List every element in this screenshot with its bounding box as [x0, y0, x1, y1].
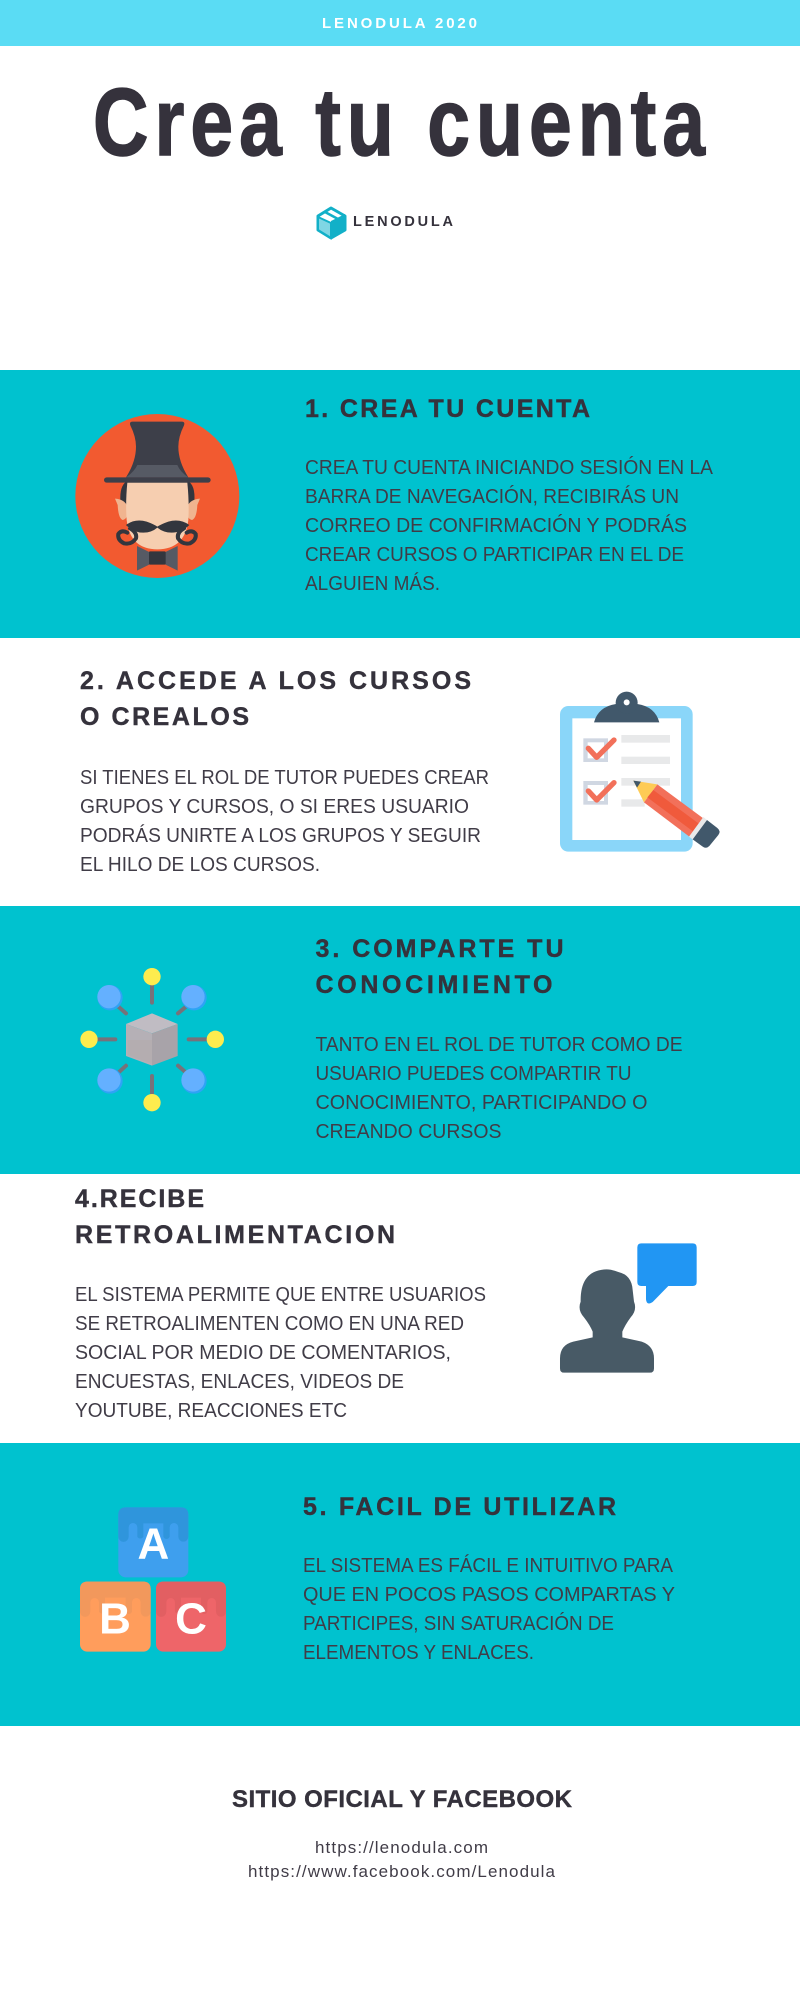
heading: step 3: 3. COMPARTE TU: [316, 935, 564, 963]
heading: step 4: [75, 1185, 395, 1249]
icon: ABC blocks: B: [99, 1594, 131, 1643]
panel: step 5: [0, 1443, 800, 1726]
panel: step 4: [75, 1185, 697, 1422]
text block: step 5: EL SISTEMA ES FÁCIL E INTUITIVO PARA: [303, 1554, 673, 1577]
text block: step 4: ENCUESTAS, ENLACES, VIDEOS DE: [75, 1370, 404, 1393]
icon: person with speech bubble: [560, 1243, 697, 1373]
logo: LENODULA: [353, 214, 454, 230]
icon: cube network: [80, 968, 224, 1111]
text block: step 5: QUE EN POCOS PASOS COMPARTAS Y: [303, 1583, 675, 1606]
heading: step 3: CONOCIMIENTO: [316, 971, 552, 999]
text block: step 1: [305, 456, 713, 595]
title: Crea tu cuenta: [93, 69, 706, 176]
icon: ABC blocks: C: [175, 1594, 207, 1643]
heading: step 2: O CREALOS: [80, 703, 249, 731]
text block: step 4: [75, 1283, 486, 1422]
heading: step 2: 2. ACCEDE A LOS CURSOS: [80, 667, 471, 695]
icon: logo box: [318, 208, 345, 238]
text block: step 3: [316, 1033, 682, 1143]
panel: step 1: 1. CREA TU CUENTA: [305, 395, 590, 423]
text block: step 3: USUARIO PUEDES COMPARTIR TU: [316, 1062, 632, 1085]
text block: step 2: GRUPOS Y CURSOS, O SI ERES USUARIO: [80, 795, 469, 818]
text block: step 1: ALGUIEN MÁS.: [305, 572, 440, 595]
text block: step 4: SE RETROALIMENTEN COMO EN UNA RED: [75, 1312, 464, 1335]
logo: [318, 208, 454, 238]
top banner: [0, 0, 800, 46]
icon: ABC blocks: A: [137, 1519, 169, 1568]
panel: step 2: [80, 667, 720, 876]
text block: step 2: SI TIENES EL ROL DE TUTOR PUEDES CREAR: [80, 766, 489, 789]
top banner: LENODULA 2020: [322, 15, 477, 32]
text block: step 2: [80, 766, 489, 876]
text block: step 3: CREANDO CURSOS: [316, 1120, 502, 1143]
text block: step 5: PARTICIPES, SIN SATURACIÓN DE: [303, 1612, 614, 1635]
footer: SITIO OFICIAL Y FACEBOOK: [232, 1786, 573, 1813]
footer: https://www.facebook.com/Lenodula: [248, 1862, 556, 1881]
text block: step 4: YOUTUBE, REACCIONES ETC: [75, 1399, 347, 1422]
panel: step 3: [0, 906, 800, 1174]
text block: step 5: ELEMENTOS Y ENLACES.: [303, 1641, 534, 1664]
text block: step 5: [303, 1554, 675, 1664]
icon: man with top hat: [75, 414, 239, 578]
text block: step 4: SOCIAL POR MEDIO DE COMENTARIOS,: [75, 1341, 451, 1364]
text block: step 1: CREAR CURSOS O PARTICIPAR EN EL DE: [305, 543, 684, 566]
heading: step 4: 4.RECIBE: [75, 1185, 204, 1213]
text block: step 3: CONOCIMIENTO, PARTICIPANDO O: [316, 1091, 648, 1114]
footer: [232, 1786, 573, 1881]
heading: step 4: RETROALIMENTACION: [75, 1221, 395, 1249]
text block: step 3: TANTO EN EL ROL DE TUTOR COMO DE: [316, 1033, 682, 1056]
icon: clipboard with pencil: [560, 692, 720, 852]
panel: step 1: [0, 370, 800, 638]
text block: step 1: CORREO DE CONFIRMACIÓN Y PODRÁS: [305, 514, 687, 537]
icon: ABC blocks: [80, 1507, 226, 1652]
text block: step 2: PODRÁS UNIRTE A LOS GRUPOS Y SEGUIR: [80, 824, 481, 847]
text block: step 1: CREA TU CUENTA INICIANDO SESIÓN EN LA: [305, 456, 713, 479]
text block: step 2: EL HILO DE LOS CURSOS.: [80, 853, 320, 876]
text block: step 4: EL SISTEMA PERMITE QUE ENTRE USUARIOS: [75, 1283, 486, 1306]
heading: step 2: [80, 667, 471, 731]
text block: step 1: BARRA DE NAVEGACIÓN, RECIBIRÁS UN: [305, 485, 679, 508]
panel: step 5: 5. FACIL DE UTILIZAR: [303, 1493, 616, 1521]
footer: https://lenodula.com: [315, 1838, 488, 1857]
heading: step 3: [316, 935, 564, 999]
